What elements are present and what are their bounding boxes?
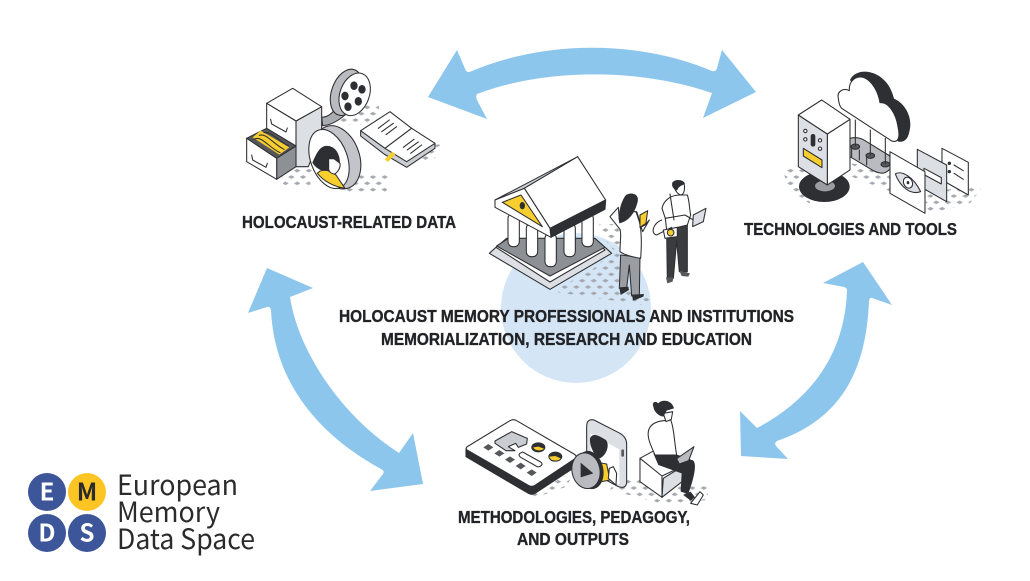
logo letter S: S: [80, 514, 95, 548]
logo letter S: [68, 514, 106, 552]
cloud: [838, 72, 910, 142]
label: holocaust-related data: HOLOCAUST-RELATED DATA: [242, 212, 456, 232]
illustration: holocaust-related data: [247, 65, 445, 196]
portrait disc: [301, 119, 369, 196]
tablet with icons: [466, 420, 577, 494]
label: technologies and tools: TECHNOLOGIES AND TOOLS: [744, 219, 957, 239]
illustration: methodologies, pedagogy and outputs: [466, 401, 710, 505]
illustration: professionals and institutions: [489, 157, 706, 306]
dotted floor: [782, 163, 983, 214]
man with laptop: [653, 180, 706, 283]
open book: [361, 112, 435, 167]
label: and outputs: AND OUTPUTS: [517, 529, 629, 549]
base stand: [799, 171, 850, 202]
logo letter D: D: [38, 514, 56, 548]
logo wordmark: European: [117, 464, 238, 504]
logo letter D: [28, 514, 66, 552]
arrow: data to tools, two-way: [428, 48, 756, 119]
phone with person: [587, 420, 627, 487]
logo wordmark: [117, 464, 255, 558]
logo letter M: [68, 472, 106, 511]
logo wordmark: Data Space: [117, 518, 255, 558]
film reel: [322, 65, 376, 126]
arrow: data to methodologies, two-way: [248, 268, 423, 491]
dotted floor: [553, 223, 652, 306]
dotted floor: [280, 103, 445, 193]
illustration: technologies and tools: [782, 72, 983, 214]
play button disc: [569, 448, 607, 492]
dotted floor: [527, 473, 710, 505]
server tower: [798, 100, 850, 185]
logo letter E: [28, 472, 66, 511]
logo letter M: M: [77, 472, 97, 508]
museum building: [489, 157, 612, 289]
logo letter E: E: [40, 472, 54, 508]
centre background circle: [501, 233, 651, 383]
label: professionals and institutions: HOLOCAUST MEMORY PROFESSIONALS AND INSTITUTIONS: [339, 306, 794, 326]
label: methodologies, pedagogy: METHODOLOGIES, PEDAGOGY,: [458, 507, 690, 527]
arrow: tools to methodologies, two-way: [740, 262, 892, 459]
connector platform: [850, 120, 892, 173]
logo wordmark: Memory: [117, 491, 220, 531]
filing cabinet: [247, 88, 322, 179]
woman on cube with laptop: [640, 401, 703, 505]
document panels: [890, 148, 968, 213]
label: memorialization, research and education: MEMORIALIZATION, RESEARCH AND EDUCATION: [381, 329, 752, 349]
EMDS logo: [28, 464, 255, 558]
woman with folder: [610, 194, 649, 301]
